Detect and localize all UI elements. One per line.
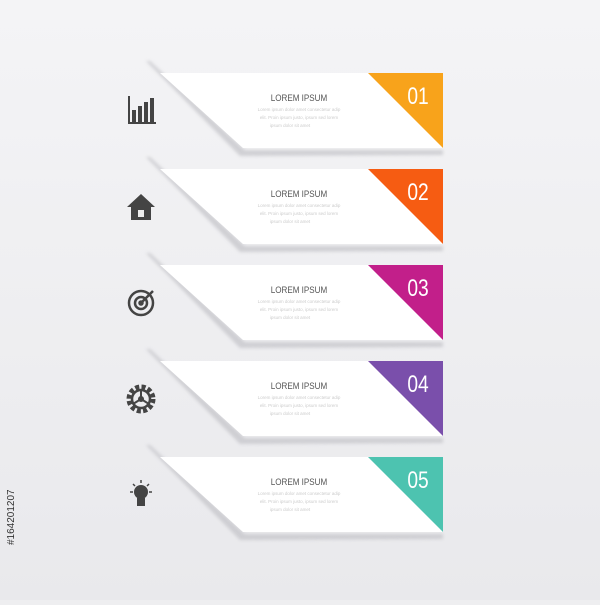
shadow [146, 61, 443, 156]
step 5: ipsum dolor sit amet [270, 507, 311, 512]
step 4 [129, 349, 443, 444]
step 2: ipsum dolor sit amet [270, 219, 311, 224]
step 2: LOREM IPSUM [271, 188, 327, 199]
step 5: Lorem ipsum dolor amet consectetur adip [258, 491, 341, 496]
number triangle [368, 73, 443, 148]
icon: gear [129, 387, 153, 411]
step 3: elit. Proin ipsum justo, ipsum sed lorem [260, 307, 338, 312]
step 5: 05 [407, 466, 429, 494]
icon: bulb [130, 480, 152, 506]
step 1 [128, 61, 443, 156]
step 4: Lorem ipsum dolor amet consectetur adip [258, 395, 341, 400]
step 4: ipsum dolor sit amet [270, 411, 311, 416]
step 3: 03 [407, 274, 429, 302]
step 5 [130, 445, 443, 540]
step 1: elit. Proin ipsum justo, ipsum sed lorem [260, 115, 338, 120]
side caption: #164201207 [6, 489, 17, 545]
step 1: ipsum dolor sit amet [270, 123, 311, 128]
step 2 [127, 157, 443, 252]
step 5: elit. Proin ipsum justo, ipsum sed lorem [260, 499, 338, 504]
step 3: ipsum dolor sit amet [270, 315, 311, 320]
step 3: LOREM IPSUM [271, 284, 327, 295]
icon: house [127, 194, 155, 220]
step 1: Lorem ipsum dolor amet consectetur adip [258, 107, 341, 112]
icon: target [129, 291, 153, 315]
step 4: elit. Proin ipsum justo, ipsum sed lorem [260, 403, 338, 408]
step 2: elit. Proin ipsum justo, ipsum sed lorem [260, 211, 338, 216]
step 4: LOREM IPSUM [271, 380, 327, 391]
step 2: 02 [407, 178, 429, 206]
step 1: 01 [407, 82, 429, 110]
step 4: 04 [407, 370, 429, 398]
step 3 [129, 253, 443, 348]
step 3: Lorem ipsum dolor amet consectetur adip [258, 299, 341, 304]
step 5: LOREM IPSUM [271, 476, 327, 487]
banner [160, 73, 443, 148]
text block: LOREM IPSUM [271, 92, 327, 103]
icon: chart [128, 96, 156, 124]
step 2: Lorem ipsum dolor amet consectetur adip [258, 203, 341, 208]
